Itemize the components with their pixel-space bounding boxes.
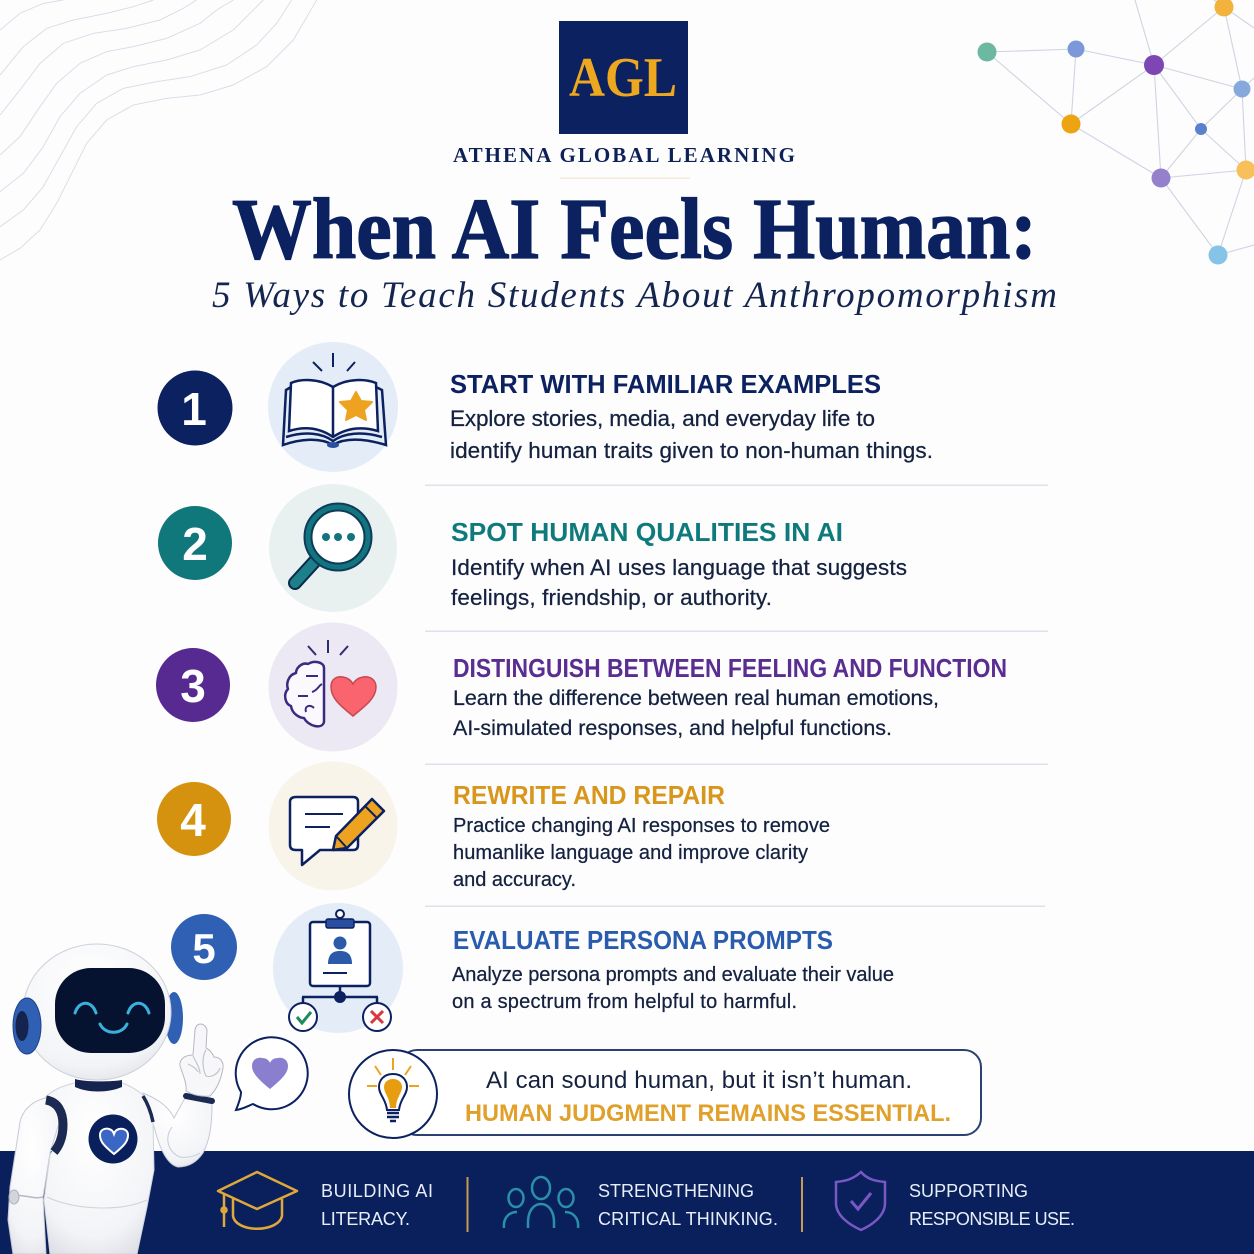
robot torso xyxy=(44,1083,154,1254)
badge 1: 1 xyxy=(181,383,207,435)
footer label 2 xyxy=(598,1181,778,1229)
logo: AGL xyxy=(569,47,677,109)
heading 3: DISTINGUISH BETWEEN FEELING AND FUNCTION xyxy=(453,653,1007,683)
text 4: Practice changing AI responses to remove xyxy=(453,815,830,837)
background wave lines xyxy=(0,0,317,260)
heading 1: START WITH FAMILIAR EXAMPLES xyxy=(450,369,881,399)
subtitle: 5 Ways to Teach Students About Anthropomorphism xyxy=(212,275,1057,316)
footer label 3: RESPONSIBLE USE. xyxy=(909,1209,1075,1229)
icon: persona clipboard with decision tree xyxy=(273,903,403,1033)
robot head xyxy=(23,944,171,1080)
icon: shield xyxy=(836,1172,885,1230)
footer label 2: STRENGTHENING xyxy=(598,1181,754,1201)
footer label 1 xyxy=(321,1181,433,1229)
text 1: identify human traits given to non-human things. xyxy=(450,438,933,463)
text 5 xyxy=(452,964,894,1013)
text 5: Analyze persona prompts and evaluate their value xyxy=(452,964,894,986)
badge 5 xyxy=(171,914,237,980)
robot shoulder straps xyxy=(46,1096,153,1152)
robot chest emblem xyxy=(88,1114,138,1164)
icon: speech bubble with pencil xyxy=(268,762,398,890)
badge 1 xyxy=(158,370,232,446)
item 4 xyxy=(157,762,830,891)
footer label 3: SUPPORTING xyxy=(909,1181,1028,1201)
badge 5: 5 xyxy=(192,925,216,972)
item 1 xyxy=(158,342,933,472)
title: When AI Feels Human: xyxy=(232,180,1037,277)
badge 2 xyxy=(158,506,232,580)
item 5 xyxy=(171,903,894,1033)
icon: open book with star xyxy=(268,342,398,472)
badge 3 xyxy=(156,648,230,722)
icon: brain and heart xyxy=(268,622,398,752)
text 4: humanlike language and improve clarity xyxy=(453,842,808,864)
callout text: AI can sound human, but it isn’t human. xyxy=(486,1067,912,1094)
badge 2: 2 xyxy=(182,518,208,570)
icon: light bulb xyxy=(349,1050,437,1138)
text 3: Learn the difference between real human emotions, xyxy=(453,686,939,710)
text 4 xyxy=(453,815,830,891)
text 5: on a spectrum from helpful to harmful. xyxy=(452,991,797,1013)
speech bubble with heart xyxy=(236,1037,308,1110)
item 2 xyxy=(158,484,907,612)
text 2: feelings, friendship, or authority. xyxy=(451,585,772,610)
heading 2: SPOT HUMAN QUALITIES IN AI xyxy=(451,517,843,547)
robot right arm xyxy=(143,1093,212,1167)
text 3: AI-simulated responses, and helpful functions. xyxy=(453,716,892,740)
robot mascot xyxy=(8,944,223,1254)
heading 4: REWRITE AND REPAIR xyxy=(453,780,725,810)
text 3 xyxy=(453,686,939,740)
text 1 xyxy=(450,406,933,463)
item 3 xyxy=(156,622,1007,752)
footer label 1: LITERACY. xyxy=(321,1209,410,1229)
robot left ear xyxy=(13,998,41,1054)
robot neck xyxy=(75,1079,122,1092)
robot wrist and hand xyxy=(180,1024,223,1101)
robot face xyxy=(75,1003,149,1032)
badge 4 xyxy=(157,782,231,856)
badge 4: 4 xyxy=(180,794,206,846)
icon: people xyxy=(504,1177,578,1228)
badge 3: 3 xyxy=(180,660,206,712)
text 4: and accuracy. xyxy=(453,869,576,891)
logo xyxy=(559,21,688,134)
network graphic xyxy=(978,0,1254,264)
text 2 xyxy=(451,555,907,610)
text 2: Identify when AI uses language that suggests xyxy=(451,555,907,580)
callout xyxy=(349,1050,981,1138)
robot right ear xyxy=(165,992,183,1044)
organisation name: ATHENA GLOBAL LEARNING xyxy=(453,143,795,167)
footer label 2: CRITICAL THINKING. xyxy=(598,1209,778,1229)
robot left arm xyxy=(8,1098,60,1254)
footer band xyxy=(0,1151,1254,1254)
heading 5: EVALUATE PERSONA PROMPTS xyxy=(453,925,833,955)
icon: graduation cap xyxy=(218,1172,297,1229)
text 1: Explore stories, media, and everyday life to xyxy=(450,406,875,431)
robot visor xyxy=(55,968,165,1053)
callout emphasis: HUMAN JUDGMENT REMAINS ESSENTIAL. xyxy=(465,1100,951,1127)
icon: magnifier xyxy=(269,484,397,612)
footer label 1: BUILDING AI xyxy=(321,1181,433,1201)
footer label 3 xyxy=(909,1181,1075,1229)
